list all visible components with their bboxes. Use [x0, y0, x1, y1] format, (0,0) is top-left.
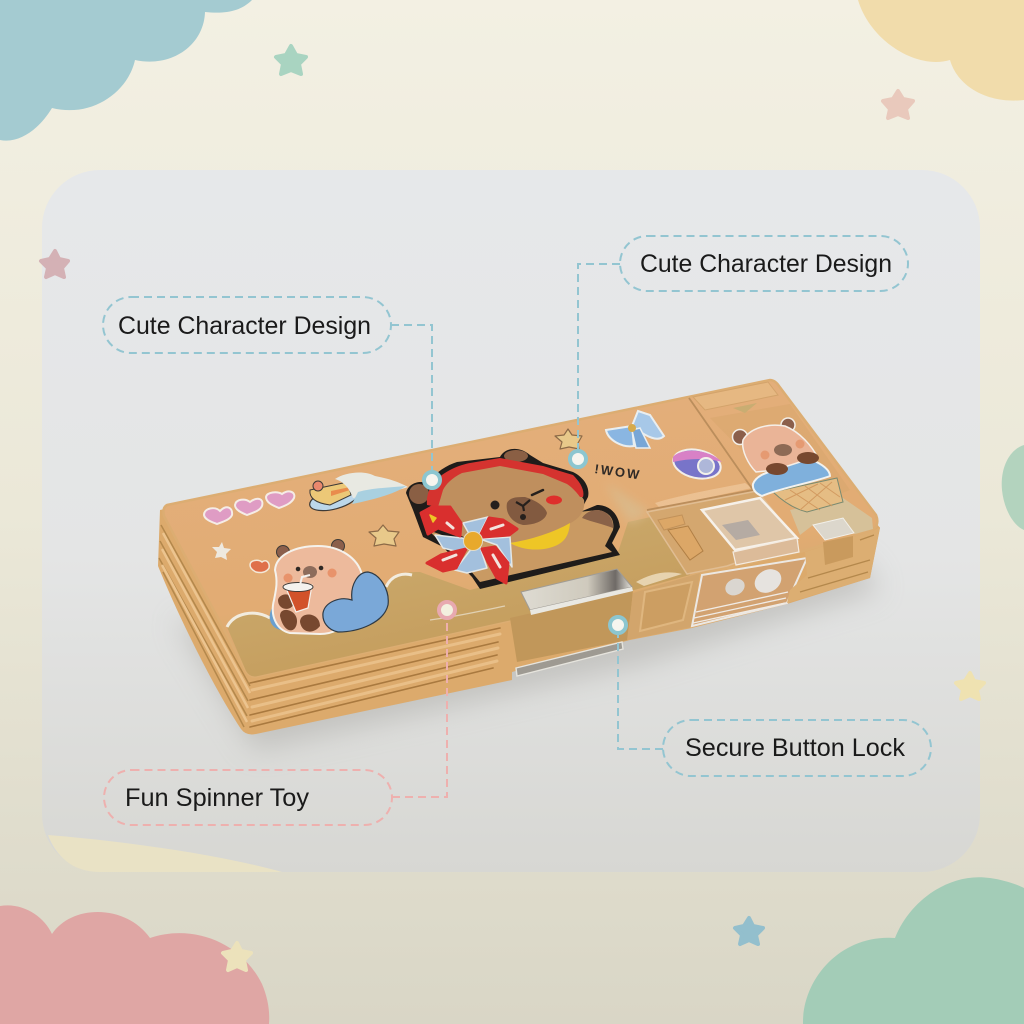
- star: mauve: [41, 251, 68, 277]
- callout pill: [663, 720, 931, 776]
- blue heart: [323, 572, 388, 632]
- gloss highlight lower: [636, 572, 682, 586]
- section: sharpener well: [647, 491, 799, 574]
- bear ear left: [409, 484, 429, 504]
- callout connector: [578, 264, 620, 449]
- door inner panel: [710, 404, 850, 510]
- clear box front: [733, 538, 799, 565]
- callout marker: [570, 451, 586, 467]
- callout connector: [392, 620, 447, 797]
- callout marker: [439, 602, 455, 618]
- pencil case: [158, 380, 880, 734]
- end recess: [823, 536, 853, 565]
- star: blue: [735, 918, 763, 944]
- sticker: tan star right: [555, 429, 582, 449]
- bear head: [432, 461, 584, 543]
- star: yellow right: [956, 673, 984, 699]
- bear nose: [516, 500, 530, 511]
- case: body sides: [158, 380, 880, 734]
- bear body: [273, 546, 362, 634]
- cone waffle lines: [785, 482, 840, 510]
- callout marker: [610, 617, 626, 633]
- bear muzzle: [303, 566, 317, 578]
- door groove: [647, 398, 753, 510]
- lid crack highlight: [430, 606, 505, 620]
- star: pink: [883, 91, 913, 118]
- window stripes: [693, 592, 788, 623]
- bear arm: [582, 510, 613, 528]
- lid lower tan band: [227, 516, 690, 676]
- slider knob upper: [658, 515, 685, 530]
- bear drink cup: [286, 585, 312, 612]
- callout pill: [103, 297, 391, 353]
- callout: fun spinner toy: [104, 602, 455, 825]
- sticker: drinking bear: [270, 540, 388, 634]
- icon: ice cream cone: [773, 478, 843, 512]
- window hole left: [723, 576, 747, 598]
- pinwheel hub: [464, 532, 482, 550]
- callout: right cute character design: [570, 236, 908, 467]
- case: left side highlights: [162, 533, 250, 722]
- end rib lines: [800, 535, 874, 592]
- cloud: bottom right green: [803, 877, 1024, 1024]
- sticker: cake: [307, 481, 361, 515]
- star: yellow bottom: [223, 943, 251, 970]
- callout connector: [618, 635, 663, 749]
- bear bib: [510, 523, 570, 550]
- sticker: wow text: !WOW: [594, 461, 642, 483]
- bear eyes: [298, 568, 321, 569]
- gloss highlight upper: [655, 483, 752, 508]
- bear eye: [490, 500, 500, 510]
- icon: right metal tab: [813, 518, 854, 540]
- bear muzzle: [507, 497, 547, 525]
- panel: product backdrop: [42, 170, 980, 872]
- red blades: [421, 507, 461, 536]
- bear ear right: [504, 450, 528, 462]
- section: clear front window: [692, 558, 807, 626]
- bear black outline: [406, 449, 620, 589]
- sticker: small heart: [250, 560, 269, 573]
- icon: ice cream scoop: [753, 459, 830, 496]
- gloss highlights: [606, 482, 650, 524]
- top tab: [693, 382, 778, 410]
- cloud: right edge green: [1002, 445, 1024, 530]
- sticker: tan star left: [369, 525, 399, 546]
- drop shadow under case: [175, 560, 880, 750]
- sticker: bow: [606, 411, 664, 448]
- callout: secure button lock: [610, 617, 931, 776]
- yellow blade mark: [430, 515, 436, 522]
- bear cheeks: [288, 573, 332, 578]
- icon: door bear: [732, 418, 819, 475]
- embossed square: [640, 582, 692, 631]
- callout label: Cute Character Design: [640, 250, 892, 278]
- bear legs and arms: [278, 594, 320, 632]
- character: pinwheel toy: [421, 507, 517, 583]
- panel corner wedge: [48, 835, 282, 872]
- callout marker: [424, 472, 440, 488]
- callout: left cute character design: [103, 297, 440, 488]
- well floor: [647, 491, 798, 574]
- window hole right: [750, 564, 786, 598]
- section: lock cavity: [510, 569, 633, 676]
- star: green: [276, 46, 306, 74]
- sticker: cloud shade: [352, 486, 406, 504]
- section: square block: [627, 573, 700, 640]
- slider knob lower: [668, 526, 703, 560]
- sticker: hearts: [204, 491, 294, 524]
- lid cloud outline: [227, 574, 412, 627]
- bear wink: [532, 490, 543, 495]
- callout pill: [620, 236, 908, 291]
- icon: lower metal bar: [516, 642, 623, 676]
- case: left side ridges: [159, 525, 250, 727]
- callout connector: [391, 325, 432, 470]
- cloud: bottom left pink: [0, 905, 269, 1024]
- blade highlights: [443, 523, 503, 567]
- cavity panel: [510, 590, 633, 662]
- cloud: top right yellow: [858, 0, 1024, 101]
- small star on door: [733, 403, 757, 413]
- callout label: Cute Character Design: [118, 312, 371, 340]
- section: right end ribs: [787, 527, 880, 603]
- case: lid top face: [163, 380, 877, 676]
- bear left blue accent: [270, 600, 290, 631]
- sticker: cloud: [335, 472, 408, 498]
- sticker: camera: [671, 445, 723, 483]
- case: front ridges: [250, 628, 500, 727]
- blue blades: [435, 517, 512, 573]
- character: big bear: [406, 449, 620, 589]
- icon: metal lock plate: [521, 569, 632, 610]
- door gloss right: [790, 498, 873, 535]
- bear cheek: [546, 496, 562, 504]
- section: side door: [647, 382, 873, 535]
- cloud: top left teal: [0, 0, 252, 141]
- sharpener mechanism: [722, 520, 760, 540]
- callout pill: [104, 770, 392, 825]
- sticker: sparkle stars: [212, 542, 231, 560]
- callout label: Fun Spinner Toy: [125, 784, 310, 812]
- bear headphone band: [427, 458, 583, 507]
- callout label: Secure Button Lock: [685, 734, 905, 762]
- clear sharpener box: [702, 498, 797, 550]
- bear body: [428, 510, 613, 582]
